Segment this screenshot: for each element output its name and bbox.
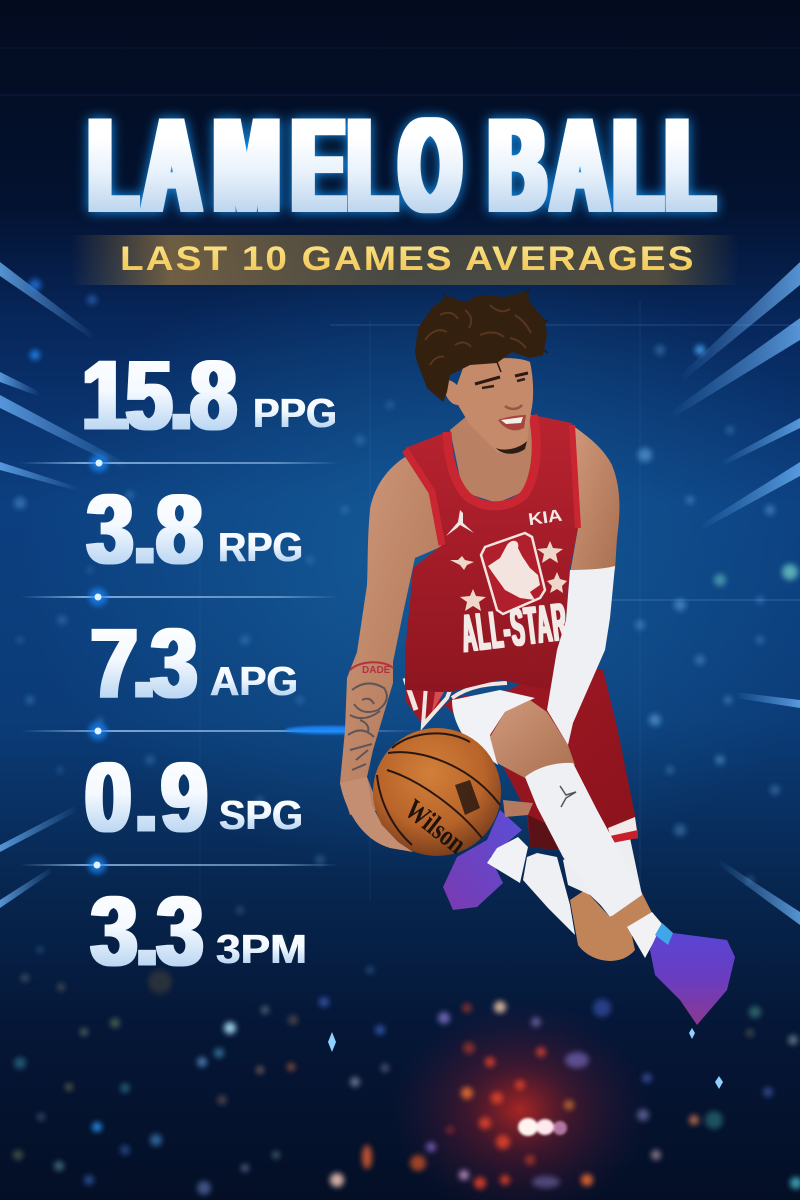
jersey: stars xyxy=(450,541,567,611)
player: left arm xyxy=(340,457,445,815)
player: basketball xyxy=(373,728,501,860)
divider: SPG / 3PM xyxy=(20,856,340,874)
player: rear leg and shoe xyxy=(523,853,735,1025)
stat: 3PM: 3PM xyxy=(216,926,307,972)
stat: SPG: 0.9 xyxy=(85,744,207,853)
stat: 3PM: 3.3 xyxy=(91,878,203,987)
player: fingers behind ball xyxy=(503,800,533,817)
player: forearm tattoo: DADE xyxy=(362,665,391,676)
player: forearm tattoo xyxy=(348,662,393,770)
player: white tube under shorts xyxy=(563,835,642,916)
player: jersey xyxy=(405,415,578,692)
star glints xyxy=(328,1028,723,1089)
subtitle band xyxy=(70,235,740,285)
player: basketball: Wilson xyxy=(399,793,472,860)
player: knee sleeve xyxy=(525,763,642,917)
stat: APG: APG xyxy=(210,658,298,704)
stat: APG: 7.3 xyxy=(91,610,197,719)
player xyxy=(340,289,735,1025)
red flash xyxy=(518,1118,567,1136)
jersey: KIA: KIA xyxy=(527,506,563,529)
stat: PPG: PPG xyxy=(253,390,337,436)
stat: 3PM xyxy=(91,878,307,987)
stat: RPG: RPG xyxy=(218,524,303,570)
player: neck and chest xyxy=(450,415,537,503)
divider: PPG / RPG xyxy=(20,454,340,472)
player: right arm xyxy=(570,425,619,574)
bokeh dots xyxy=(13,279,800,1195)
stat: SPG xyxy=(85,744,303,853)
player: front shoe xyxy=(443,810,522,910)
player: shorts xyxy=(405,650,638,850)
subtitle band: LAST 10 GAMES AVERAGES xyxy=(120,239,693,277)
player: ankle sock xyxy=(487,837,528,883)
player: shorts trim xyxy=(405,677,507,725)
stat: RPG xyxy=(87,476,303,585)
stat: PPG: 15.8 xyxy=(82,342,237,451)
title: LAMELO BALL xyxy=(89,92,714,240)
player: thigh and knee xyxy=(490,700,575,778)
stat: RPG: 3.8 xyxy=(87,476,203,585)
stat: PPG xyxy=(82,342,337,451)
player: hair xyxy=(415,289,548,402)
jersey: ALL-STAR: ALL-STAR xyxy=(458,593,570,664)
jersey: NBA logo xyxy=(481,533,545,614)
player: hand xyxy=(340,777,413,852)
jersey: Jordan logo xyxy=(446,510,474,536)
player: white tights xyxy=(452,690,535,765)
stat: SPG: SPG xyxy=(219,792,303,838)
divider: RPG / APG xyxy=(20,588,340,606)
stat: APG xyxy=(91,610,298,719)
divider: APG / SPG xyxy=(20,722,420,740)
player: face xyxy=(442,358,533,454)
player: arm sleeve xyxy=(547,566,615,745)
